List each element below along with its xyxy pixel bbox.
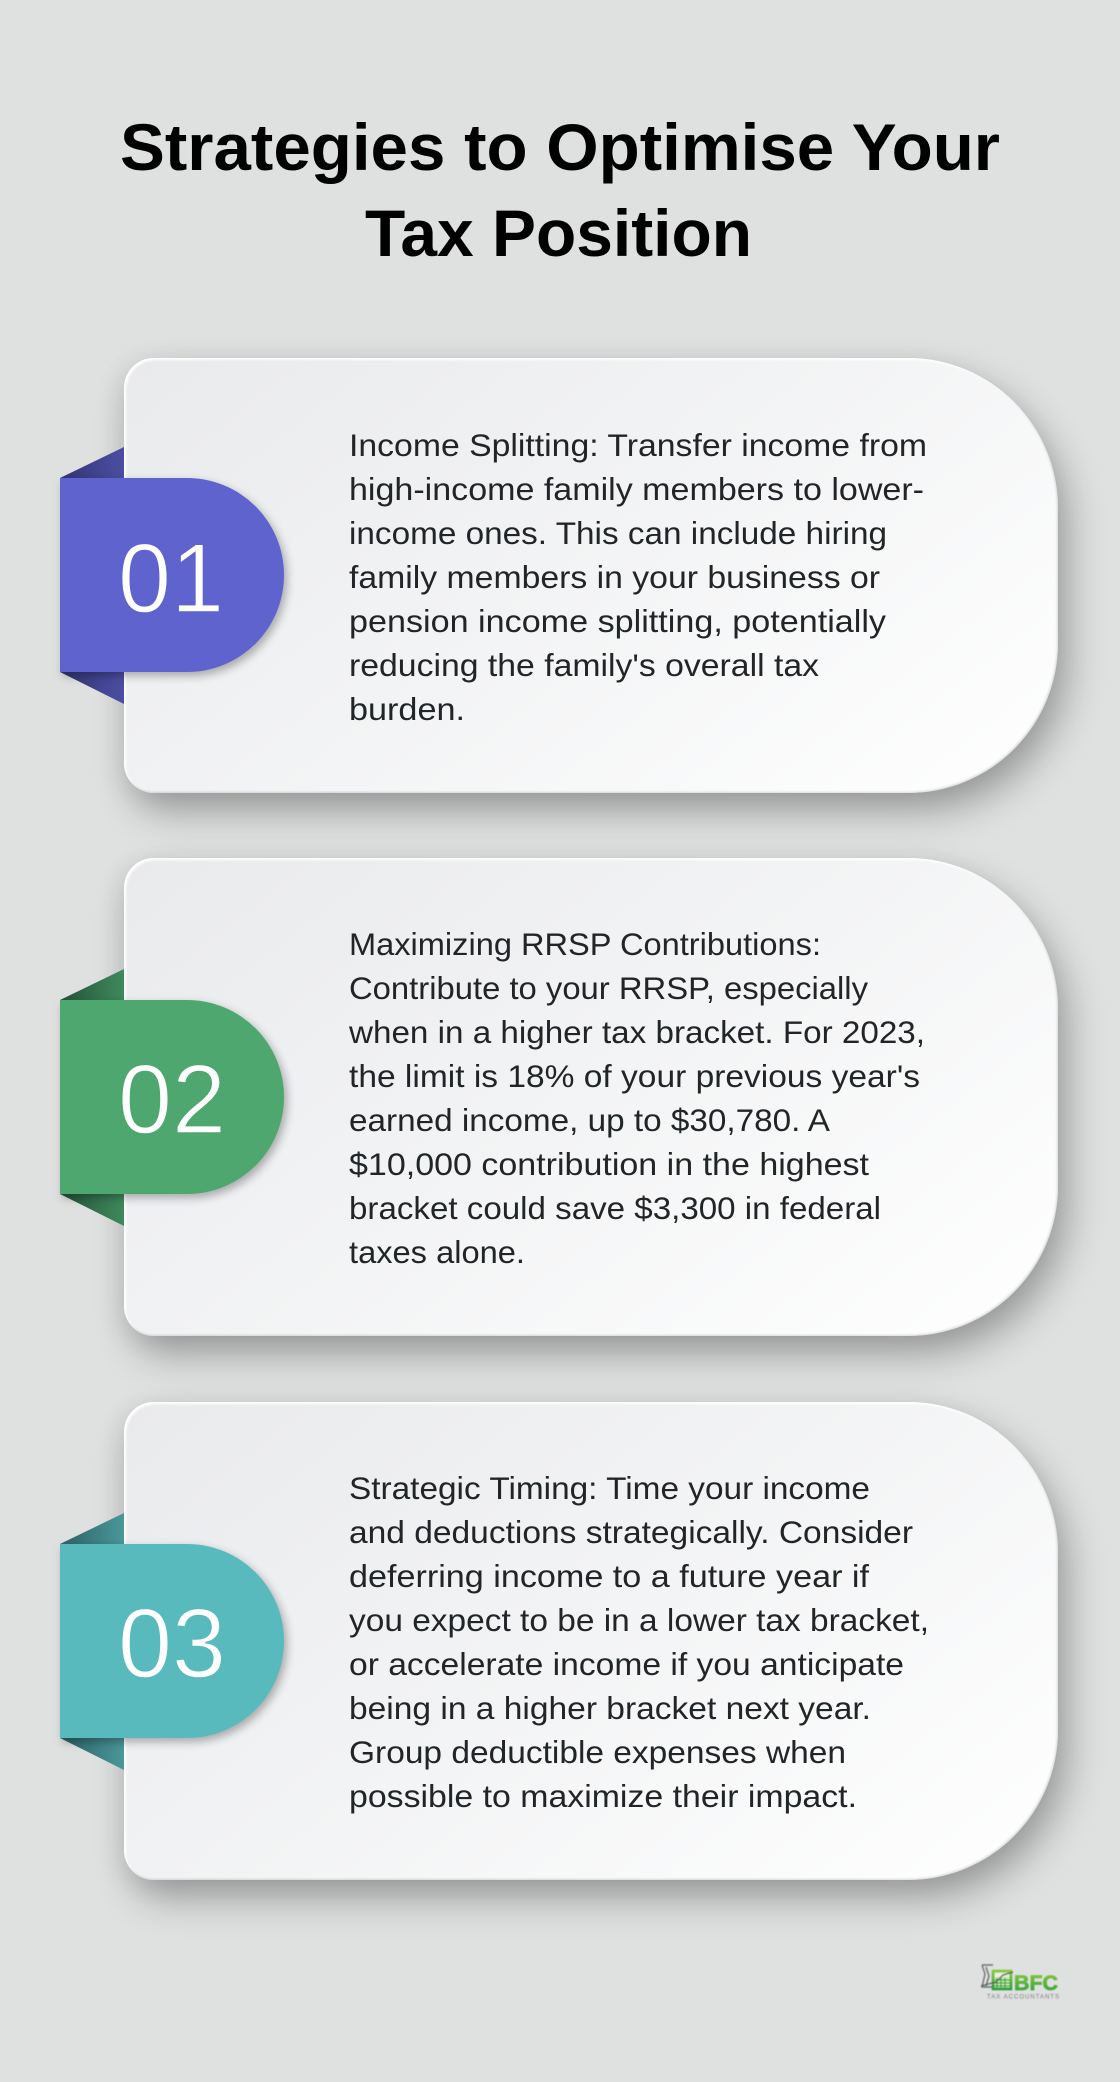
ribbon folds xyxy=(60,447,124,704)
text: income splitting: Income Splitting: Transfer income from xyxy=(349,427,927,463)
number tab 02: 02 xyxy=(118,1044,226,1154)
panel: income splitting xyxy=(58,352,1089,832)
icon: calculator xyxy=(981,1965,1013,1989)
card background xyxy=(124,858,1058,1336)
logo tagline: TAX ACCOUNTANTS xyxy=(987,1994,1059,2000)
title xyxy=(120,110,1000,270)
ribbon folds xyxy=(60,1513,124,1770)
text: RRSP contributions: Contribute to your RRSP, especially xyxy=(349,970,868,1006)
text: income splitting xyxy=(349,427,927,727)
text: strategic timing: and deductions strategically. Consider xyxy=(349,1514,913,1550)
number tab 01 xyxy=(60,478,284,672)
text: RRSP contributions: when in a higher tax bracket. For 2023, xyxy=(348,1014,925,1050)
logo wordmark: BFC xyxy=(1014,1972,1058,1995)
text: RRSP contributions: taxes alone. xyxy=(349,1234,525,1270)
text: strategic timing: deferring income to a future year if xyxy=(349,1558,869,1594)
text: income splitting: high-income family members to lower- xyxy=(349,471,924,507)
number tab 01: 01 xyxy=(118,523,224,633)
text: strategic timing: Group deductible expenses when xyxy=(349,1734,846,1770)
text: RRSP contributions: Maximizing RRSP Contributions: xyxy=(349,926,821,962)
text: RRSP contributions: earned income, up to $30,780. A xyxy=(349,1102,830,1138)
title: Strategies to Optimise Your xyxy=(120,110,1000,184)
title: Tax Position xyxy=(365,196,752,270)
number tab 03 xyxy=(60,1544,284,1738)
card background xyxy=(124,358,1058,793)
text: strategic timing: you expect to be in a lower tax bracket, xyxy=(349,1602,929,1638)
text: income splitting: reducing the family's overall tax xyxy=(349,647,819,683)
number tab 03: 03 xyxy=(118,1588,226,1698)
text: RRSP contributions: bracket could save $3,300 in federal xyxy=(349,1190,881,1226)
panel: RRSP contributions xyxy=(58,852,1089,1375)
text: income splitting: burden. xyxy=(349,691,465,727)
text: income splitting: pension income splitting, potentially xyxy=(349,603,886,639)
text: strategic timing: or accelerate income if you anticipate xyxy=(349,1646,904,1682)
card background xyxy=(124,1402,1058,1880)
text: RRSP contributions xyxy=(348,926,925,1270)
panel: strategic timing xyxy=(58,1396,1089,1919)
text: strategic timing: possible to maximize their impact. xyxy=(349,1778,857,1814)
text: RRSP contributions: the limit is 18% of your previous year's xyxy=(349,1058,920,1094)
number tab 02 xyxy=(60,1000,284,1194)
text: strategic timing: Strategic Timing: Time your income xyxy=(349,1470,870,1506)
text: income splitting: family members in your business or xyxy=(349,559,880,595)
text: income splitting: income ones. This can include hiring xyxy=(349,515,887,551)
ribbon folds xyxy=(60,969,124,1226)
text: RRSP contributions: $10,000 contribution in the highest xyxy=(349,1146,869,1182)
logo: BFC Tax Accountants xyxy=(980,1964,1060,2000)
text: strategic timing: being in a higher bracket next year. xyxy=(349,1690,871,1726)
text: strategic timing xyxy=(349,1470,929,1814)
